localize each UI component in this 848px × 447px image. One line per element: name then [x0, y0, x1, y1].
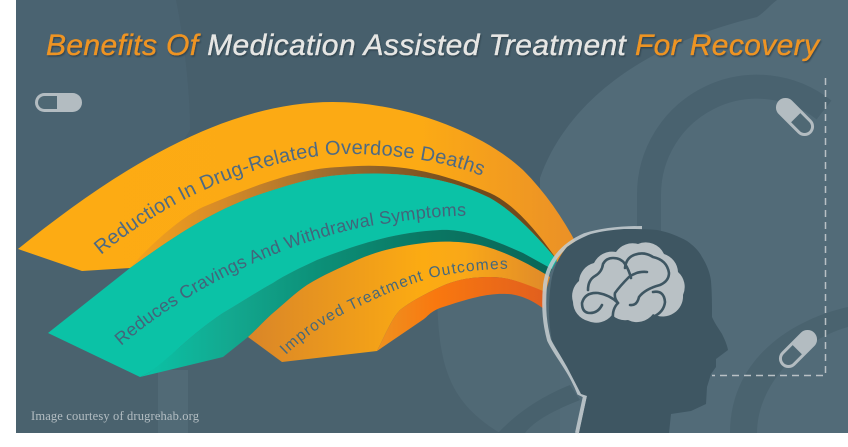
ribbon label: Reduces Cravings And Withdrawal Symptoms [114, 206, 466, 345]
head outline [544, 228, 642, 433]
ribbon underside [377, 277, 546, 351]
head fill [549, 229, 728, 433]
image credit: Image courtesy of drugrehab.org [31, 409, 200, 423]
dashed frame line [712, 78, 826, 376]
icon: brain [572, 242, 685, 323]
ribbon label: Improved Treatment Outcomes [280, 260, 508, 354]
icon: upper right capsule [772, 94, 818, 140]
title: Benefits Of Medication Assisted Treatment For Recovery [46, 29, 821, 62]
gold ribbon: overdose deaths [18, 102, 575, 271]
icon: lower right capsule [775, 326, 821, 372]
orange ribbon: treatment outcomes [248, 242, 550, 362]
icon: left capsule [35, 93, 82, 112]
teal ribbon: cravings and withdrawal [48, 174, 557, 377]
ribbon underside [130, 166, 557, 268]
ribbon label: Reduction In Drug-Related Overdose Deaths [94, 140, 484, 254]
head silhouette [544, 228, 728, 433]
